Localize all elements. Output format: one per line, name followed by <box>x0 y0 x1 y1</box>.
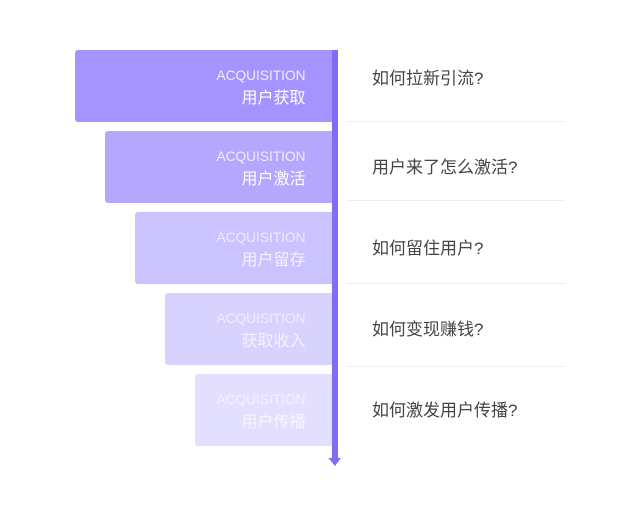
label: acquisition 3: ACQUISITION <box>217 230 306 245</box>
label: 用户激活: 用户激活 <box>241 171 306 188</box>
panel: referral funnel step 5 <box>195 374 332 446</box>
question: 如何留住用户: 如何留住用户? <box>372 239 483 258</box>
question: 用户来了怎么激活: 用户来了怎么激活? <box>372 158 517 177</box>
question: 如何拉新引流: 如何拉新引流? <box>372 69 483 88</box>
question: 如何变现赚钱: 如何变现赚钱? <box>372 320 483 339</box>
label: acquisition 2: ACQUISITION <box>217 149 306 164</box>
label: 获取收入: 获取收入 <box>241 333 306 350</box>
panel: acquisition funnel step 1 <box>75 50 332 122</box>
label: 用户传播: 用户传播 <box>241 414 306 431</box>
arrow: funnel direction <box>328 50 341 466</box>
label: acquisition 1: ACQUISITION <box>217 68 306 83</box>
label: 用户留存: 用户留存 <box>241 252 306 269</box>
label: 用户获取: 用户获取 <box>241 90 306 107</box>
question: 如何激发用户传播: 如何激发用户传播? <box>372 401 517 420</box>
panel: revenue funnel step 4 <box>165 293 332 365</box>
panel: retention funnel step 3 <box>135 212 332 284</box>
panel: activation funnel step 2 <box>105 131 332 203</box>
label: acquisition 5: ACQUISITION <box>217 392 306 407</box>
label: acquisition 4: ACQUISITION <box>217 311 306 326</box>
